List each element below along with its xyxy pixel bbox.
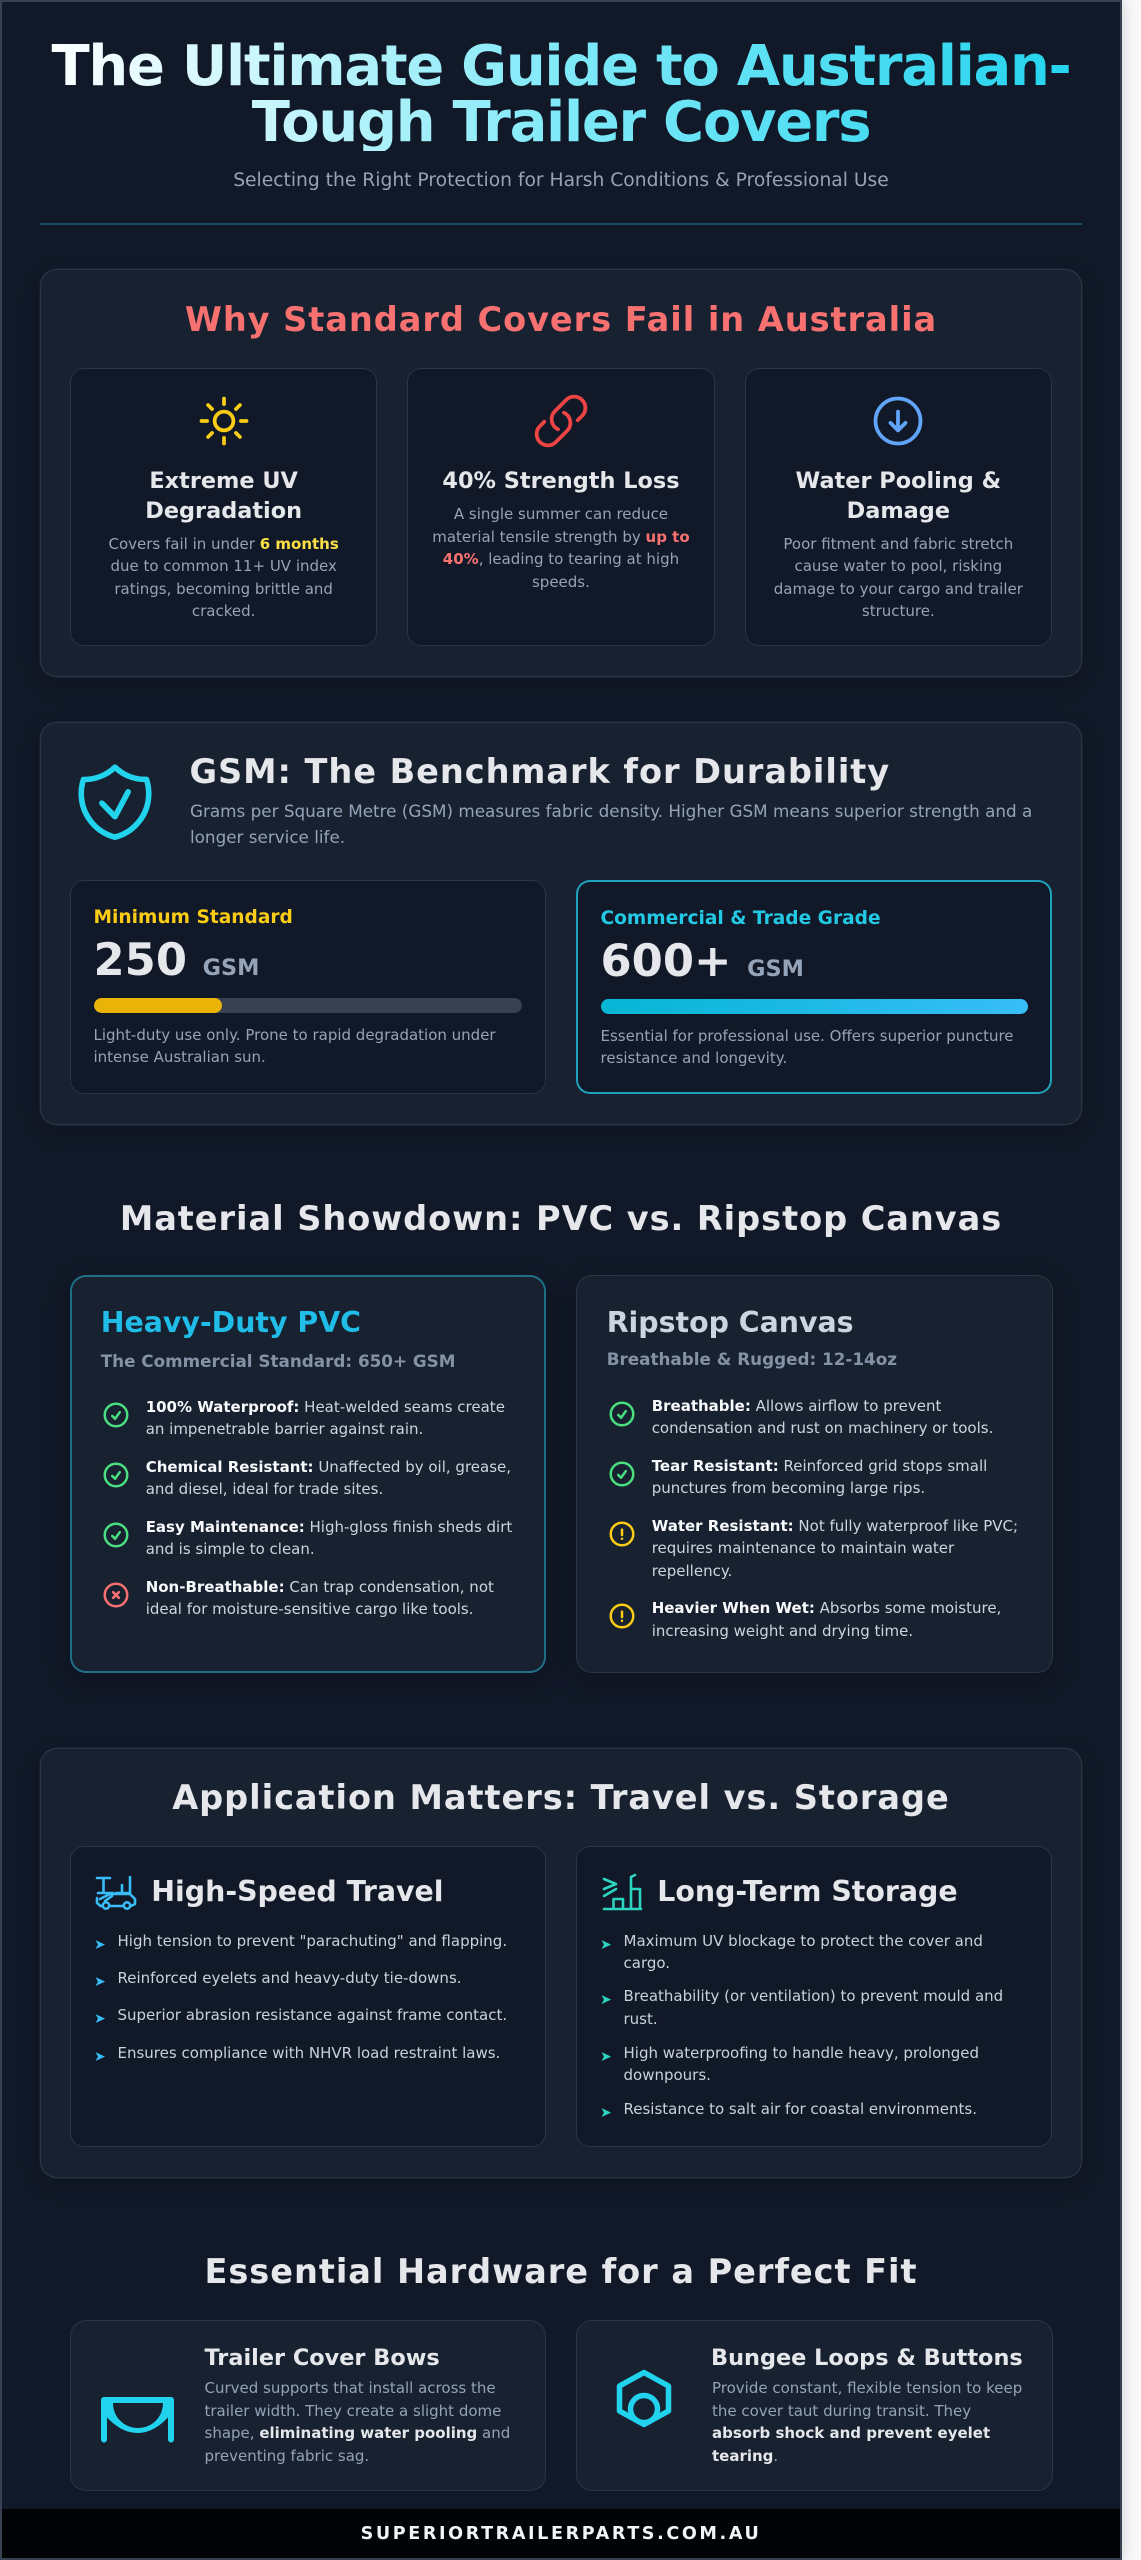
item text — [652, 1517, 1018, 1580]
card text: ratings, becoming brittle and — [114, 580, 333, 598]
panel: heavy-duty PVC — [70, 1275, 546, 1673]
card text: cracked. — [192, 602, 255, 620]
description: preventing fabric sag. — [204, 2446, 369, 2464]
item text: condensation and rust on machinery or tools. — [652, 1419, 993, 1437]
icon: trailer vehicle — [96, 1876, 136, 1910]
description: Essential for professional use. Offers superior puncture — [600, 1027, 1014, 1045]
list item: cargo. — [624, 1954, 670, 1972]
description: shape, eliminating water pooling and — [204, 2424, 510, 2442]
icon: arrow down circle — [874, 396, 922, 446]
item text: repellency. — [652, 1562, 732, 1580]
description: Provide constant, flexible tension to keep — [712, 2379, 1022, 2397]
description: tearing. — [712, 2446, 778, 2464]
description: Light-duty use only. Prone to rapid degradation under — [94, 1026, 496, 1044]
list item — [600, 2098, 1040, 2120]
list item: ➤ — [600, 1992, 612, 2008]
list item: ➤ — [600, 1936, 612, 1952]
heading: GSM: GSM: The Benchmark for Durability — [190, 752, 890, 791]
description — [600, 1027, 1014, 1067]
panel: GSM benchmark — [40, 722, 1082, 1125]
label: Commercial & Trade Grade — [600, 908, 881, 928]
item text: Easy Maintenance: High-gloss finish sheds dirt — [146, 1518, 512, 1536]
card heading: Water Pooling & — [796, 468, 1001, 494]
heading: material showdown: Material Showdown: PVC vs. Ripstop Canvas — [120, 1199, 1002, 1238]
list item: High tension to prevent "parachuting" and flapping. — [118, 1932, 507, 1950]
card text: Covers fail in under 6 months — [108, 535, 339, 553]
heading: essential hardware: Essential Hardware for a Perfect Fit — [204, 2252, 918, 2291]
heading: Trailer Cover Bows — [204, 2345, 440, 2371]
GSM explanation: Grams per Square Metre (GSM) measures fabric density. Higher GSM means superior strength and a — [190, 801, 1032, 821]
panel: why standard covers fail — [40, 269, 1082, 677]
card: water pooling — [745, 368, 1052, 646]
card: extreme UV — [70, 368, 377, 646]
value: 250 GSM: 250 GSM — [94, 933, 259, 986]
icon: cross — [104, 1582, 128, 1608]
item: breathable — [610, 1397, 993, 1437]
list item: ➤ — [94, 1936, 106, 1952]
heading: application: Application Matters: Travel vs. Storage — [172, 1778, 950, 1816]
heading: Heavy-Duty PVC — [101, 1306, 361, 1339]
icon: bungee loop — [596, 2350, 696, 2450]
item text: Non-Breathable: Can trap condensation, not — [146, 1578, 494, 1596]
card text: structure. — [862, 602, 935, 620]
list item: ➤ — [94, 1974, 106, 1990]
item: waterproof — [104, 1398, 505, 1438]
item: easy maintenance — [104, 1518, 512, 1558]
list item: Resistance to salt air for coastal environments. — [624, 2100, 977, 2118]
title — [40, 39, 1082, 151]
panel: application matters — [40, 1748, 1082, 2178]
item: water resistant — [610, 1517, 1018, 1580]
item text — [146, 1578, 494, 1618]
panel: ripstop canvas — [576, 1275, 1053, 1673]
list item — [600, 1985, 1040, 2031]
card text: speeds. — [532, 572, 590, 590]
GSM explanation — [190, 801, 1032, 847]
icon: storage — [596, 1870, 646, 1920]
icon: warning — [610, 1522, 634, 1546]
card text: cause water to pool, risking — [794, 557, 1002, 575]
description: the cover taut during transit. They — [712, 2402, 971, 2420]
icon: warning — [610, 1604, 634, 1628]
item text — [146, 1518, 512, 1558]
card: strength loss — [407, 368, 715, 646]
item text: Heavier When Wet: Absorbs some moisture, — [652, 1599, 1001, 1617]
card text: material tensile strength by up to — [432, 528, 690, 546]
card text — [432, 505, 690, 590]
list item — [600, 1930, 1040, 1976]
subtitle: Selecting the Right Protection for Harsh Conditions & Professional Use — [233, 170, 889, 191]
item text — [652, 1457, 987, 1497]
list item — [94, 2042, 534, 2064]
progress bar 30% — [94, 998, 522, 1013]
icon: sun — [200, 396, 248, 446]
footer: SUPERIORTRAILERPARTS.COM.AU — [361, 2524, 761, 2544]
card text: A single summer can reduce — [454, 505, 668, 523]
item text: and diesel, ideal for trade sites. — [146, 1480, 383, 1498]
description — [712, 2377, 1022, 2467]
item text: Breathable: Allows airflow to prevent — [652, 1397, 941, 1415]
label: Minimum Standard — [94, 906, 293, 928]
list item: High waterproofing to handle heavy, prolonged — [624, 2044, 979, 2062]
card: high-speed travel — [70, 1846, 546, 2147]
item text: ideal for moisture-sensitive cargo like tools. — [146, 1600, 474, 1618]
icon: cover bow — [80, 2350, 190, 2470]
item text: and is simple to clean. — [146, 1540, 315, 1558]
card text: Poor fitment and fabric stretch — [783, 535, 1013, 553]
title: Tough Trailer Covers — [252, 90, 870, 155]
card heading: Degradation — [145, 498, 302, 524]
item text: Water Resistant: Not fully waterproof like PVC; — [652, 1517, 1018, 1535]
icon: check — [610, 1402, 634, 1426]
card text: due to common 11+ UV index — [110, 557, 337, 575]
list item: rust. — [624, 2010, 658, 2028]
item text: punctures from becoming large rips. — [652, 1479, 925, 1497]
card: trailer cover bows — [70, 2320, 546, 2491]
item text: requires maintenance to maintain water — [652, 1539, 954, 1557]
item text — [146, 1398, 505, 1438]
description: absorb shock and prevent eyelet — [712, 2424, 990, 2442]
card heading — [796, 468, 1001, 524]
item text — [652, 1599, 1001, 1640]
item text: an impenetrable barrier against rain. — [146, 1420, 423, 1438]
icon: check — [104, 1402, 128, 1428]
list item: Superior abrasion resistance against frame contact. — [118, 2006, 507, 2024]
list item: Maximum UV blockage to protect the cover and — [624, 1932, 983, 1950]
list item — [600, 2042, 1040, 2088]
card text: damage to your cargo and trailer — [774, 580, 1023, 598]
item text: Chemical Resistant: Unaffected by oil, grease, — [146, 1458, 511, 1476]
item text — [652, 1397, 993, 1437]
heading: Bungee Loops & Buttons — [711, 2345, 1023, 2371]
card heading: 40% Strength Loss — [442, 468, 680, 494]
list item — [94, 1967, 534, 1990]
card: bungee loops — [576, 2320, 1053, 2491]
list item: downpours. — [624, 2066, 711, 2084]
icon: check — [104, 1522, 128, 1548]
list item: Reinforced eyelets and heavy-duty tie-downs. — [118, 1969, 462, 1987]
list item: ➤ — [94, 2011, 106, 2027]
description — [204, 2377, 510, 2467]
list item: ➤ — [600, 2104, 612, 2120]
subheading: Breathable & Rugged: 12-14oz — [607, 1349, 897, 1369]
item text: increasing weight and drying time. — [652, 1622, 913, 1640]
icon: check — [104, 1462, 128, 1488]
item: tear resistant — [610, 1457, 987, 1497]
description: trailer width. They create a slight dome — [204, 2402, 501, 2420]
list item: Ensures compliance with NHVR load restraint laws. — [118, 2044, 500, 2062]
item text: Tear Resistant: Reinforced grid stops small — [652, 1457, 987, 1475]
card text — [108, 535, 339, 620]
item: chemical resistant — [104, 1458, 511, 1498]
card: commercial grade — [576, 880, 1052, 1094]
description: Curved supports that install across the — [204, 2379, 496, 2397]
icon: chain link — [534, 394, 588, 448]
list item: ➤ — [600, 2048, 612, 2064]
list item: ➤ — [94, 2048, 106, 2064]
icon: shield check — [78, 764, 152, 840]
card: minimum standard — [70, 880, 546, 1094]
card heading: Damage — [847, 498, 950, 524]
description: intense Australian sun. — [94, 1048, 266, 1066]
card heading — [145, 468, 302, 524]
icon: check — [610, 1462, 634, 1486]
item text: 100% Waterproof: Heat-welded seams create — [146, 1398, 505, 1416]
heading: Ripstop Canvas — [607, 1306, 854, 1339]
GSM explanation: longer service life. — [190, 827, 345, 847]
title: The Ultimate Guide to Australian- — [52, 34, 1070, 99]
item: heavier when wet — [610, 1599, 1001, 1640]
subheading: The Commercial Standard: 650+ GSM — [101, 1351, 455, 1371]
footer — [2, 2509, 1120, 2558]
card heading: Extreme UV — [149, 468, 298, 494]
progress bar 100% — [600, 999, 1028, 1014]
subheading: Long-Term Storage — [657, 1875, 958, 1908]
description: resistance and longevity. — [600, 1049, 787, 1067]
card text: 40%, leading to tearing at high — [443, 550, 679, 568]
subheading: High-Speed Travel — [151, 1875, 444, 1908]
list item: Breathability (or ventilation) to prevent mould and — [624, 1987, 1003, 2005]
card text — [774, 535, 1023, 620]
item: non-breathable — [104, 1578, 494, 1618]
card: long-term storage — [576, 1846, 1052, 2147]
item text — [146, 1458, 511, 1498]
heading: why covers fail: Why Standard Covers Fail in Australia — [185, 300, 937, 339]
description — [94, 1026, 496, 1066]
value: 600+ GSM: 600+ GSM — [600, 934, 804, 987]
list item — [94, 2004, 534, 2027]
